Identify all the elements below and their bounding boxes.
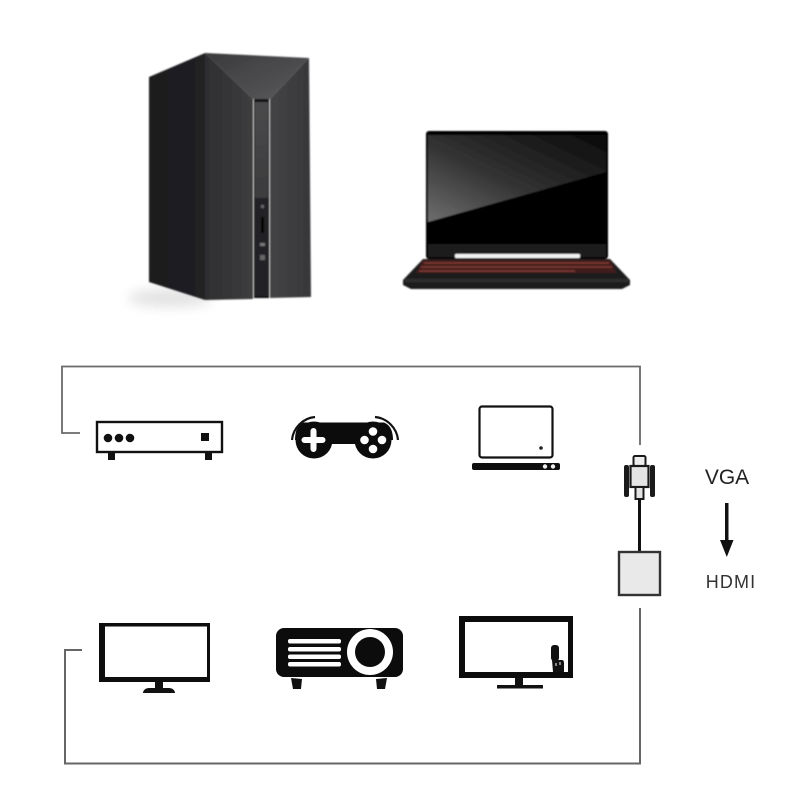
icon: set-top box: [97, 422, 222, 460]
connection line: bottom: [65, 608, 640, 764]
icon: VGA connector: [624, 456, 655, 499]
icon: touching hand: [551, 645, 564, 672]
icon: touch monitor: [459, 616, 573, 688]
photo: desktop tower computer: [128, 53, 311, 307]
label: VGA: VGA: [705, 466, 749, 489]
connection line: top: [62, 366, 640, 445]
label: HDMI: HDMI: [706, 572, 756, 592]
icon: monitor: [99, 623, 210, 693]
adapter: HDMI box: [619, 552, 660, 595]
icon: projector: [276, 628, 403, 689]
adapter cable: [638, 499, 641, 552]
arrow: VGA to HDMI: [720, 503, 734, 557]
photo: gaming laptop: [403, 131, 630, 289]
icon: laptop: [472, 406, 560, 470]
icon: game controller: [292, 417, 398, 458]
